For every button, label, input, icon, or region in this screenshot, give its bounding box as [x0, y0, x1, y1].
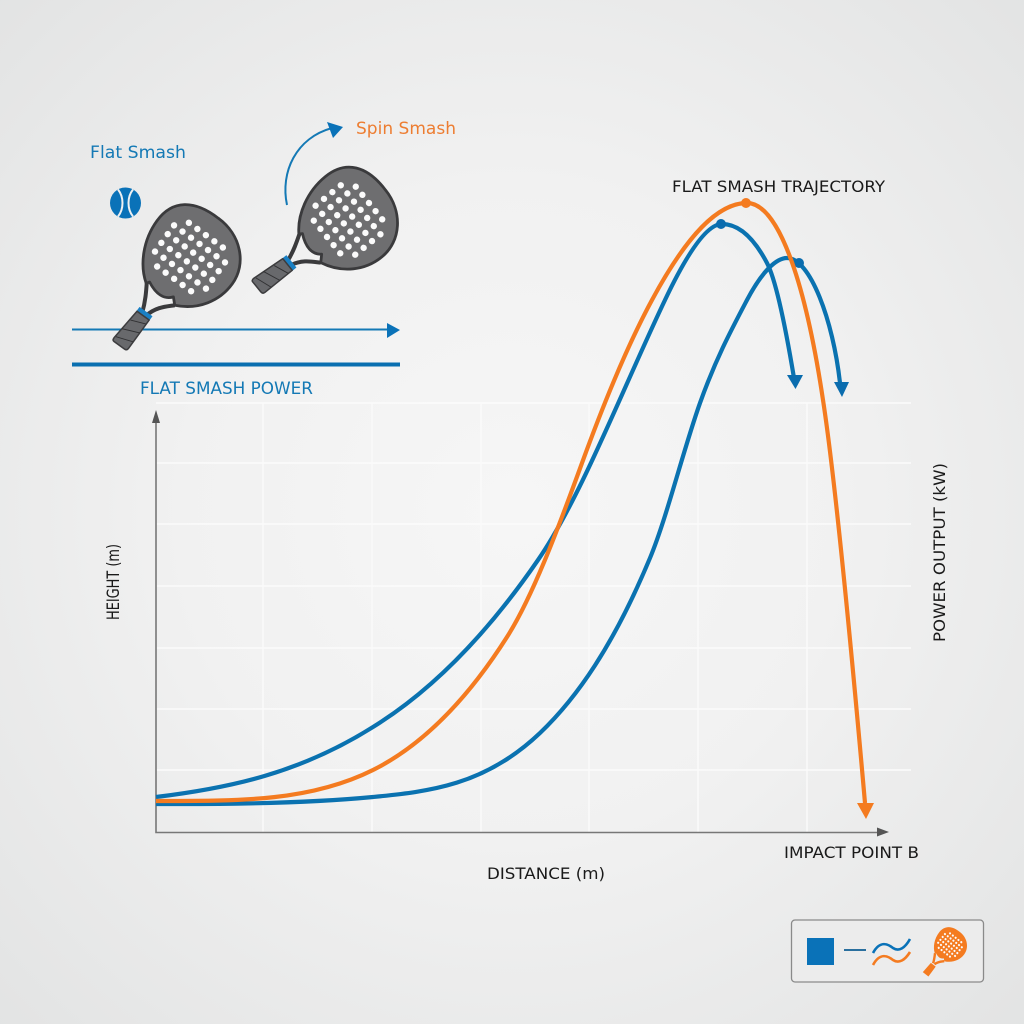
label: Spin Smash: Spin Smash — [356, 119, 456, 138]
legend dash — [844, 949, 866, 951]
label: impact point B: IMPACT POINT B — [784, 843, 919, 862]
label: Flat Smash Trajectory: FLAT SMASH TRAJECTORY — [672, 177, 885, 196]
curve: blue upper trajectory — [156, 219, 803, 797]
arrow: spin direction — [285, 122, 343, 205]
icon: flat smash racket — [85, 190, 259, 378]
legend blue square — [807, 938, 834, 965]
chart grid — [156, 403, 911, 832]
curve: blue lower trajectory — [156, 258, 849, 804]
legend orange racket icon — [914, 922, 973, 985]
right axis label: power output: POWER OUTPUT (kW) — [930, 463, 949, 642]
label: Flat Smash: Flat Smash — [90, 143, 186, 162]
legend orange wave — [873, 952, 910, 965]
x-axis label: distance: DISTANCE (m) — [487, 864, 605, 883]
axes — [152, 410, 889, 836]
power baseline — [72, 362, 400, 366]
icon: blue ball — [110, 188, 141, 218]
legend — [792, 920, 984, 985]
curve: orange trajectory — [156, 198, 874, 819]
legend blue wave — [873, 939, 910, 953]
icon: spin smash racket — [230, 152, 417, 330]
y-axis label: height: HEIGHT (m) — [104, 544, 124, 620]
label: Flat Smash Power: FLAT SMASH POWER — [140, 379, 313, 398]
power arrow — [72, 323, 400, 338]
